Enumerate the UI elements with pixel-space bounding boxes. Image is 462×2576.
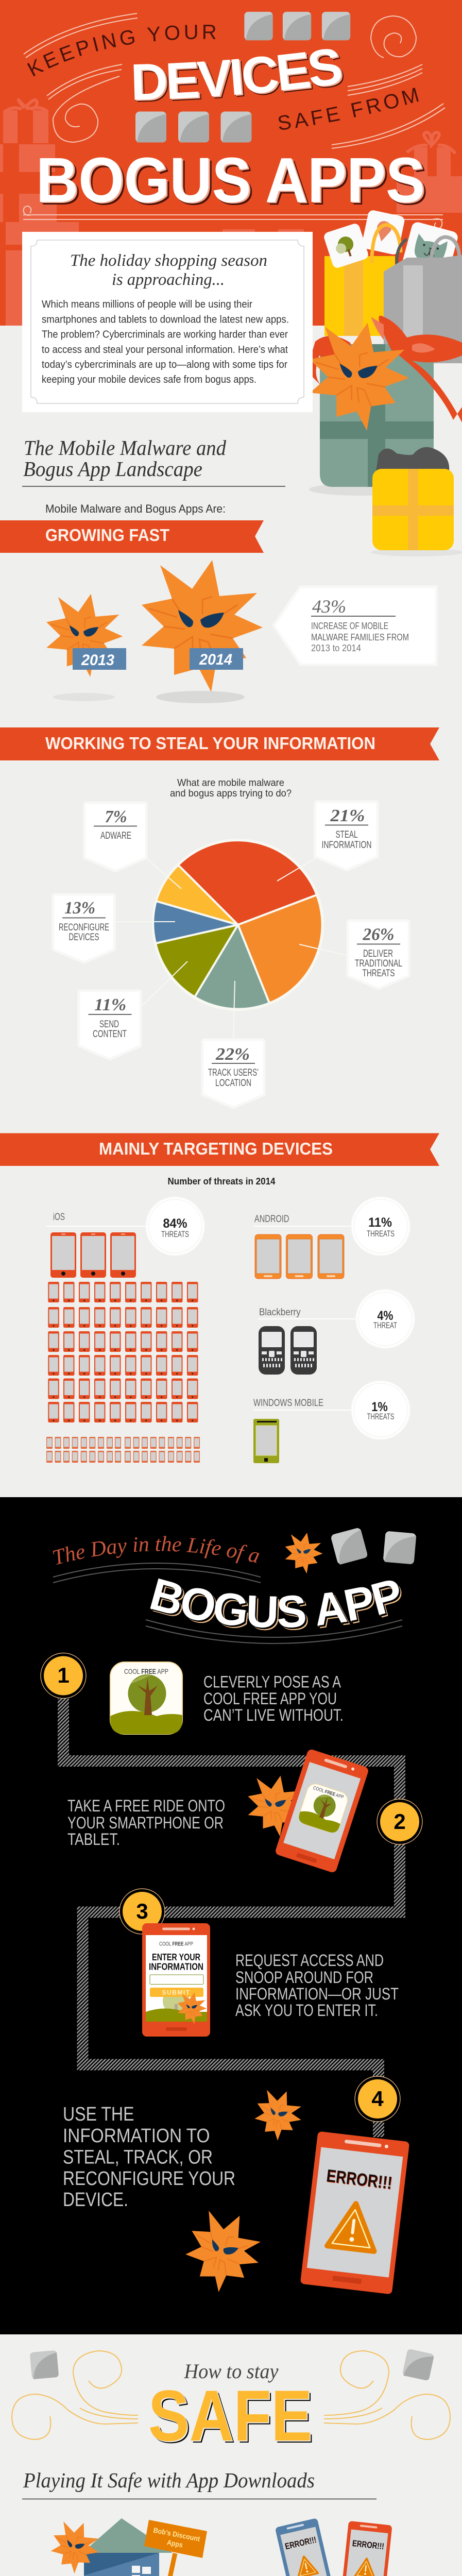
intro body text: Which means millions of people will be using their: [42, 299, 252, 310]
badge: 22% track users location: 22%: [215, 1045, 250, 1064]
title: safe from: SAFE FROM: [279, 88, 419, 130]
step 3 phone: INFORMATION: [149, 1962, 203, 1972]
heading: safe: SAFE: [148, 2375, 312, 2456]
step 2 text: [67, 1797, 225, 1849]
badge: 11% send content: [79, 991, 141, 1059]
step 3 text: [235, 1951, 399, 2020]
malware star 2014: 2014: [199, 651, 232, 668]
title: devices: DEVICES: [134, 49, 344, 102]
badge: 13% reconfigure devices: 13%: [64, 899, 95, 918]
step 3 phone: SUBMIT: [162, 1989, 191, 1996]
intro body text: [42, 299, 289, 385]
tip: alerts and warnings: ERROR!!!: [284, 2535, 317, 2551]
threats caption: Number of threats in 2014: [168, 1176, 275, 1187]
banner: mainly targeting devices: MAINLY TARGETING DEVICES: [99, 1139, 333, 1158]
step 1 marker: 1: [57, 1663, 70, 1687]
step 4 phone with error: [300, 2131, 409, 2294]
badge: 21% steal information: INFORMATION: [321, 840, 372, 851]
title: bogus apps: BOGUS APPS: [36, 145, 425, 216]
step 4 phone with error: ERROR!!!: [326, 2166, 393, 2193]
badge: 22% track users location: LOCATION: [215, 1078, 251, 1089]
step 1 text: CAN’T LIVE WITHOUT.: [203, 1706, 344, 1724]
tip: alerts and warnings: [275, 2518, 392, 2576]
title: keeping your: KEEPING YOUR: [27, 25, 216, 76]
step 3 phone: [142, 1923, 210, 2037]
badge: 22% track users location: TRACK USERS’: [208, 1067, 259, 1078]
step 1 app icon: COOL FREE APP: [124, 1667, 168, 1675]
Windows Mobile threats: WINDOWS MOBILE: [253, 1398, 323, 1409]
badge: 7% adware: 7%: [105, 807, 127, 826]
intro body text: today’s cybercriminals are up to—along with some tips for: [42, 359, 287, 370]
step 3 phone: COOL FREE APP: [159, 1941, 193, 1947]
step 1 marker: [41, 1653, 86, 1698]
tip: unfamiliar app stores: Bob’s Discount: [152, 2526, 201, 2543]
intro body text: keeping your mobile devices safe from bogus apps.: [42, 374, 256, 385]
iOS threats: [46, 1197, 204, 1463]
badge: 21% steal information: [315, 802, 378, 870]
step 2 text: TAKE A FREE RIDE ONTO: [67, 1797, 225, 1815]
banner: working to steal: [0, 727, 439, 760]
banner: mainly targeting devices: [0, 1133, 439, 1166]
step 4 text: RECONFIGURE YOUR: [63, 2168, 235, 2190]
heading: mobile malware landscape: The Mobile Malware and: [24, 436, 226, 460]
heading: playing it safe: Playing It Safe with App Downloads: [23, 2468, 315, 2492]
intro heading: is approaching...: [112, 270, 225, 289]
tip: unfamiliar app stores: Apps: [166, 2538, 184, 2549]
badge: 7% adware: ADWARE: [100, 831, 131, 841]
safe heading swirls: [12, 2351, 450, 2439]
badge: 13% reconfigure devices: [53, 894, 114, 962]
step 1 text: [203, 1672, 344, 1724]
badge: 26% deliver traditional threats: THREATS: [363, 968, 395, 979]
step 4 marker: [355, 2076, 400, 2122]
app tiles top row: [244, 12, 350, 40]
badge: 11% send content: SEND: [99, 1019, 119, 1030]
step 4 marker: 4: [371, 2087, 384, 2111]
pie question: What are mobile malware: [177, 778, 284, 788]
step 4 text: INFORMATION TO: [63, 2125, 210, 2147]
step 2 star and phone: COOL FREE APP: [312, 1785, 345, 1800]
step 3 marker: [119, 1889, 165, 1934]
badge: 13% reconfigure devices: DEVICES: [69, 932, 99, 943]
intro heading: [70, 251, 267, 289]
safe heading tiles: [30, 2349, 434, 2381]
Android threats: THREATS: [367, 1229, 395, 1239]
iOS threats: iOS: [53, 1212, 65, 1223]
step 4 text: DEVICE.: [63, 2189, 128, 2211]
step 2 text: TABLET.: [67, 1830, 120, 1849]
malware star 2013: 2013: [81, 652, 114, 669]
badge: 26% deliver traditional threats: TRADITIONAL: [355, 958, 402, 969]
intro card: [22, 232, 313, 412]
badge: 22% track users location: [202, 1040, 264, 1108]
heading: bogus app: BOGUS APP: [150, 1579, 402, 1630]
badge: 26% deliver traditional threats: 26%: [363, 925, 395, 944]
heading star and tiles: [285, 1527, 417, 1573]
iOS threats: 84%: [163, 1216, 187, 1231]
badge: 21% steal information: 21%: [330, 806, 365, 825]
heading: mobile malware landscape: Bogus App Landscape: [23, 457, 202, 481]
malware star 2013: [46, 594, 126, 701]
pie leader lines: [115, 858, 346, 1039]
hatched path: [63, 1699, 400, 2137]
step 1 app icon: [110, 1662, 182, 1734]
callout: 43%: 2013 to 2014: [311, 643, 361, 653]
day in the life heading: [53, 1536, 261, 1583]
intro body text: The problem? Cybercriminals are working harder than ever: [42, 329, 288, 341]
Blackberry threats: Blackberry: [259, 1307, 301, 1318]
step 2 marker: 2: [393, 1809, 406, 1834]
banner: growing fast: GROWING FAST: [45, 526, 169, 545]
intro body text: to access and steal your personal information. Here’s what: [42, 344, 288, 355]
Blackberry threats: 4%: [377, 1309, 393, 1323]
badge: 7% adware: [84, 803, 146, 871]
step 4 text: USE THE: [63, 2104, 134, 2125]
step 3 text: ASK YOU TO ENTER IT.: [235, 2001, 378, 2020]
step 3 marker: 3: [136, 1899, 148, 1923]
iOS threats: THREATS: [161, 1229, 189, 1239]
badge: 26% deliver traditional threats: [348, 921, 409, 989]
app tiles second row: [135, 111, 251, 142]
step 3 text: INFORMATION—OR JUST: [235, 1985, 399, 2003]
callout: 43%: INCREASE OF MOBILE: [311, 621, 388, 631]
badge: 11% send content: CONTENT: [93, 1029, 127, 1040]
Blackberry threats: THREAT: [373, 1320, 397, 1330]
step 1 text: COOL FREE APP YOU: [203, 1689, 337, 1708]
step 2 star and phone: [248, 1749, 369, 1873]
callout: 43%: [273, 587, 436, 665]
Android threats: 11%: [368, 1215, 392, 1230]
Windows Mobile threats: [253, 1381, 410, 1463]
pie question: [170, 778, 292, 799]
step 2 text: YOUR SMARTPHONE OR: [67, 1814, 224, 1832]
badge: 26% deliver traditional threats: DELIVER: [363, 948, 393, 959]
step 2 marker: [377, 1799, 422, 1844]
banner: growing fast: [0, 520, 264, 553]
Windows Mobile threats: 1%: [371, 1400, 388, 1414]
day in the life heading: The Day in the Life of a: [53, 1536, 260, 1565]
intro heading: The holiday shopping season: [70, 251, 267, 270]
heading: mobile malware landscape: [22, 436, 285, 487]
Android threats: [253, 1197, 410, 1279]
pie chart: [152, 839, 324, 1011]
step 4 text: STEAL, TRACK, OR: [63, 2146, 213, 2168]
step 4 malware stars: [178, 2087, 305, 2300]
Blackberry threats: [258, 1290, 415, 1375]
pie question: and bogus apps trying to do?: [170, 788, 292, 799]
tip: unfamiliar app stores: [48, 2518, 207, 2576]
badge: 21% steal information: STEAL: [336, 829, 357, 840]
header background gifts: [0, 100, 462, 326]
illustration: shopping bags and gifts: [306, 209, 462, 556]
callout: 43%: MALWARE FAMILIES FROM: [311, 632, 409, 642]
step 4 text: [63, 2104, 235, 2211]
badge: 13% reconfigure devices: RECONFIGURE: [59, 922, 109, 933]
banner: working to steal: WORKING TO STEAL YOUR INFORMATION: [45, 734, 375, 753]
Android threats: ANDROID: [254, 1214, 289, 1225]
tip: alerts and warnings: ERROR!!!: [352, 2538, 385, 2551]
header swirl lines: [23, 13, 445, 229]
step 3 phone: ENTER YOUR: [152, 1952, 200, 1962]
badge: 11% send content: 11%: [94, 995, 126, 1014]
Windows Mobile threats: THREATS: [367, 1412, 395, 1421]
callout: 43%: 43%: [312, 596, 346, 617]
malware star 2014: [142, 560, 263, 703]
heading: how to stay: How to stay: [184, 2360, 279, 2383]
step 1 text: CLEVERLY POSE AS A: [203, 1672, 341, 1691]
step 3 text: SNOOP AROUND FOR: [235, 1968, 373, 1987]
intro body text: smartphones and tablets to download the latest new apps.: [42, 314, 289, 326]
step 3 text: REQUEST ACCESS AND: [235, 1951, 384, 1970]
subheading: Mobile Malware and Bogus Apps Are:: [45, 502, 226, 515]
